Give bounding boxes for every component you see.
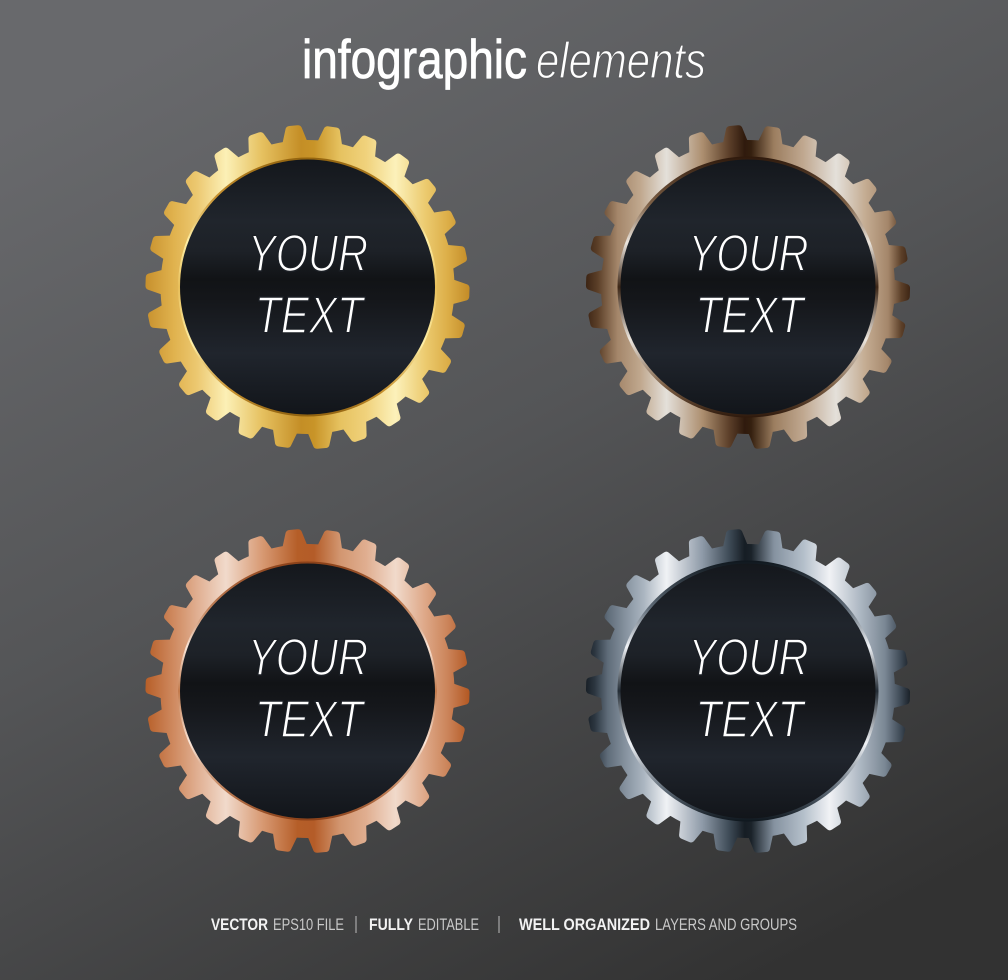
badge text: YOUR (688, 225, 808, 283)
silver gear ring (585, 528, 911, 854)
footer caption: WELL ORGANIZED (519, 915, 650, 934)
copper rim (178, 562, 437, 820)
champagne rim (618, 156, 878, 418)
champagne gear ring (585, 124, 911, 450)
badge text: TEXT (255, 691, 366, 749)
footer caption: EPS10 FILE (273, 915, 344, 934)
silver rim (618, 560, 878, 822)
copper gear ring (144, 528, 470, 854)
gold rim (178, 158, 437, 416)
dark disc (620, 564, 876, 818)
footer caption: LAYERS AND GROUPS (655, 915, 797, 934)
dark disc (180, 160, 435, 414)
badge: champagne gear (585, 124, 911, 450)
title: elements (536, 32, 706, 89)
badge text (688, 225, 808, 345)
badge text (688, 629, 808, 749)
footer caption (211, 915, 797, 934)
badge: silver gear (585, 528, 911, 854)
dark disc (620, 160, 876, 414)
badge text: TEXT (696, 691, 806, 749)
badge text: YOUR (688, 629, 808, 687)
badge text: TEXT (696, 287, 806, 345)
footer caption: VECTOR (211, 915, 268, 934)
gold gear ring (144, 124, 470, 450)
badge text (248, 629, 368, 749)
dark disc (180, 564, 435, 818)
badge text: YOUR (248, 629, 368, 687)
title (302, 28, 706, 90)
badge text: YOUR (248, 225, 368, 283)
badge: gold gear (144, 124, 470, 450)
footer caption: FULLY (369, 915, 414, 934)
title: infographic (302, 28, 527, 90)
badge text (248, 225, 368, 345)
badge: rose copper gear (144, 528, 470, 854)
badge text: TEXT (255, 287, 366, 345)
footer caption: EDITABLE (418, 915, 479, 934)
